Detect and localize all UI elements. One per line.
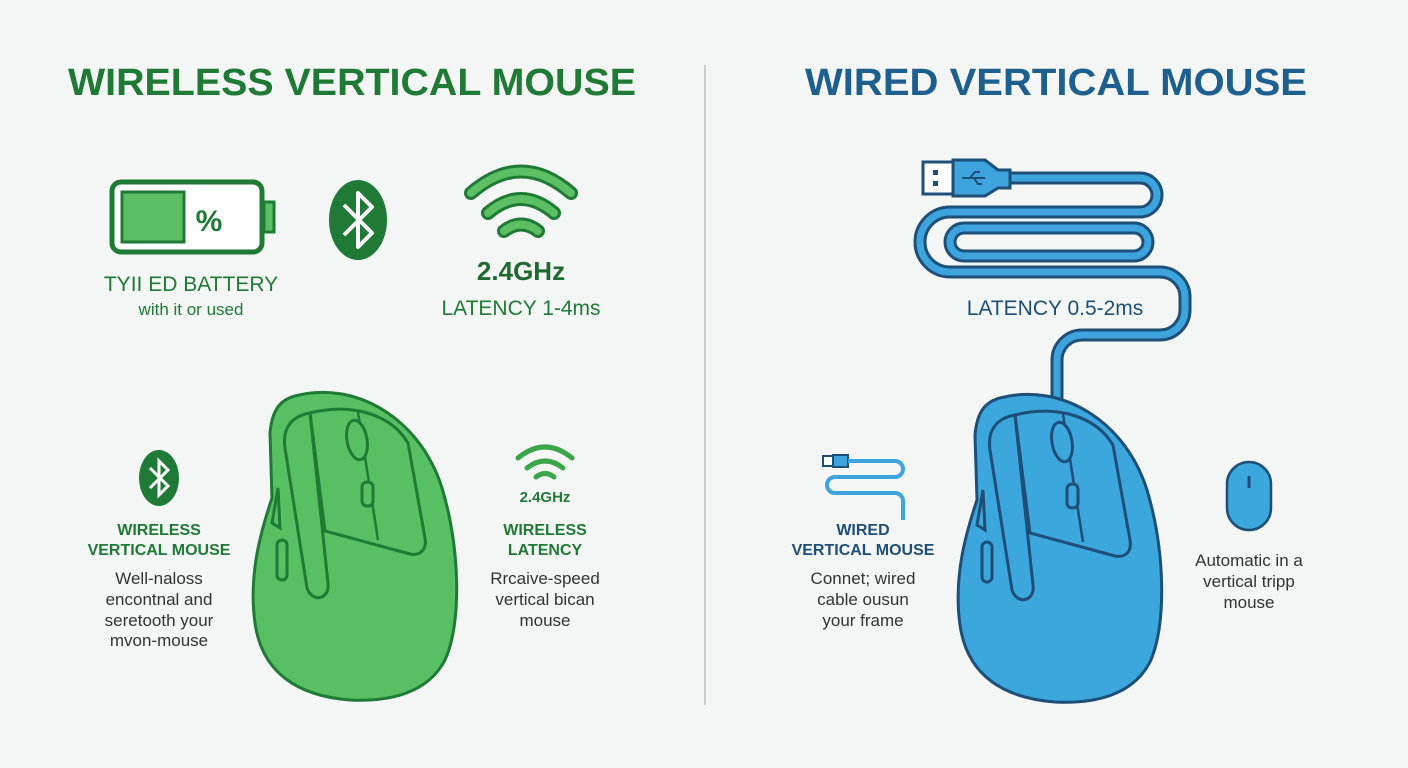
text: wireless latency: mouse bbox=[519, 611, 571, 630]
text: wireless latency: Rrcaive-speed bbox=[490, 569, 600, 588]
text: wireless vertical mouse: encontnal and bbox=[106, 590, 212, 609]
text: wired vertical mouse bbox=[792, 522, 935, 630]
text: wired vertical mouse: Connet; wired bbox=[811, 569, 915, 588]
text: wireless latency: vertical bican bbox=[495, 590, 595, 609]
blue mouse bbox=[958, 394, 1162, 702]
text: wired vertical mouse: your frame bbox=[822, 611, 904, 630]
text: wireless latency: LATENCY bbox=[508, 542, 583, 559]
icon: usb cable bbox=[920, 160, 1185, 400]
text: wireless latency: WIRELESS bbox=[503, 522, 587, 539]
text: wired vertical mouse: WIRED bbox=[836, 522, 890, 539]
text: wireless latency: 2.4GHz bbox=[520, 489, 570, 506]
icon: bluetooth bbox=[329, 180, 387, 260]
text: wireless vertical mouse: seretooth your bbox=[105, 611, 214, 630]
text: wireless latency bbox=[490, 489, 600, 630]
icon: battery bbox=[112, 182, 274, 252]
title: wireless: WIRELESS VERTICAL MOUSE bbox=[68, 62, 636, 104]
text: wireless vertical mouse: mvon-mouse bbox=[110, 631, 208, 650]
text: battery label bbox=[104, 273, 278, 319]
icon: small cable bbox=[823, 455, 903, 520]
text: wireless vertical mouse: Well-naloss bbox=[115, 569, 203, 588]
text: wired latency: LATENCY 0.5-2ms bbox=[967, 297, 1143, 320]
text: automatic bbox=[1195, 551, 1303, 612]
text: wired vertical mouse: VERTICAL MOUSE bbox=[792, 542, 935, 559]
icon: small wifi bbox=[518, 447, 572, 477]
text: battery label: with it or used bbox=[138, 300, 243, 319]
text: automatic: mouse bbox=[1223, 593, 1275, 612]
title: wired: WIRED VERTICAL MOUSE bbox=[805, 62, 1307, 104]
text: wired vertical mouse: cable ousun bbox=[817, 590, 909, 609]
text: automatic: Automatic in a bbox=[1195, 551, 1303, 570]
text: 2.4GHz latency: 2.4GHz bbox=[477, 256, 565, 286]
icon: small bluetooth bbox=[139, 450, 179, 506]
text: battery label: TYII ED BATTERY bbox=[104, 273, 278, 296]
text: wireless vertical mouse: WIRELESS bbox=[117, 522, 201, 539]
icon: wifi bbox=[471, 172, 571, 231]
text: automatic: vertical tripp bbox=[1203, 572, 1295, 591]
icon: small mouse bbox=[1227, 462, 1271, 530]
text: 2.4GHz latency bbox=[441, 256, 601, 320]
icon: battery: % bbox=[196, 205, 222, 238]
text: 2.4GHz latency: LATENCY 1-4ms bbox=[441, 297, 601, 320]
text: wireless vertical mouse: VERTICAL MOUSE bbox=[88, 542, 231, 559]
text: wireless vertical mouse bbox=[88, 522, 231, 650]
green mouse bbox=[253, 392, 457, 700]
